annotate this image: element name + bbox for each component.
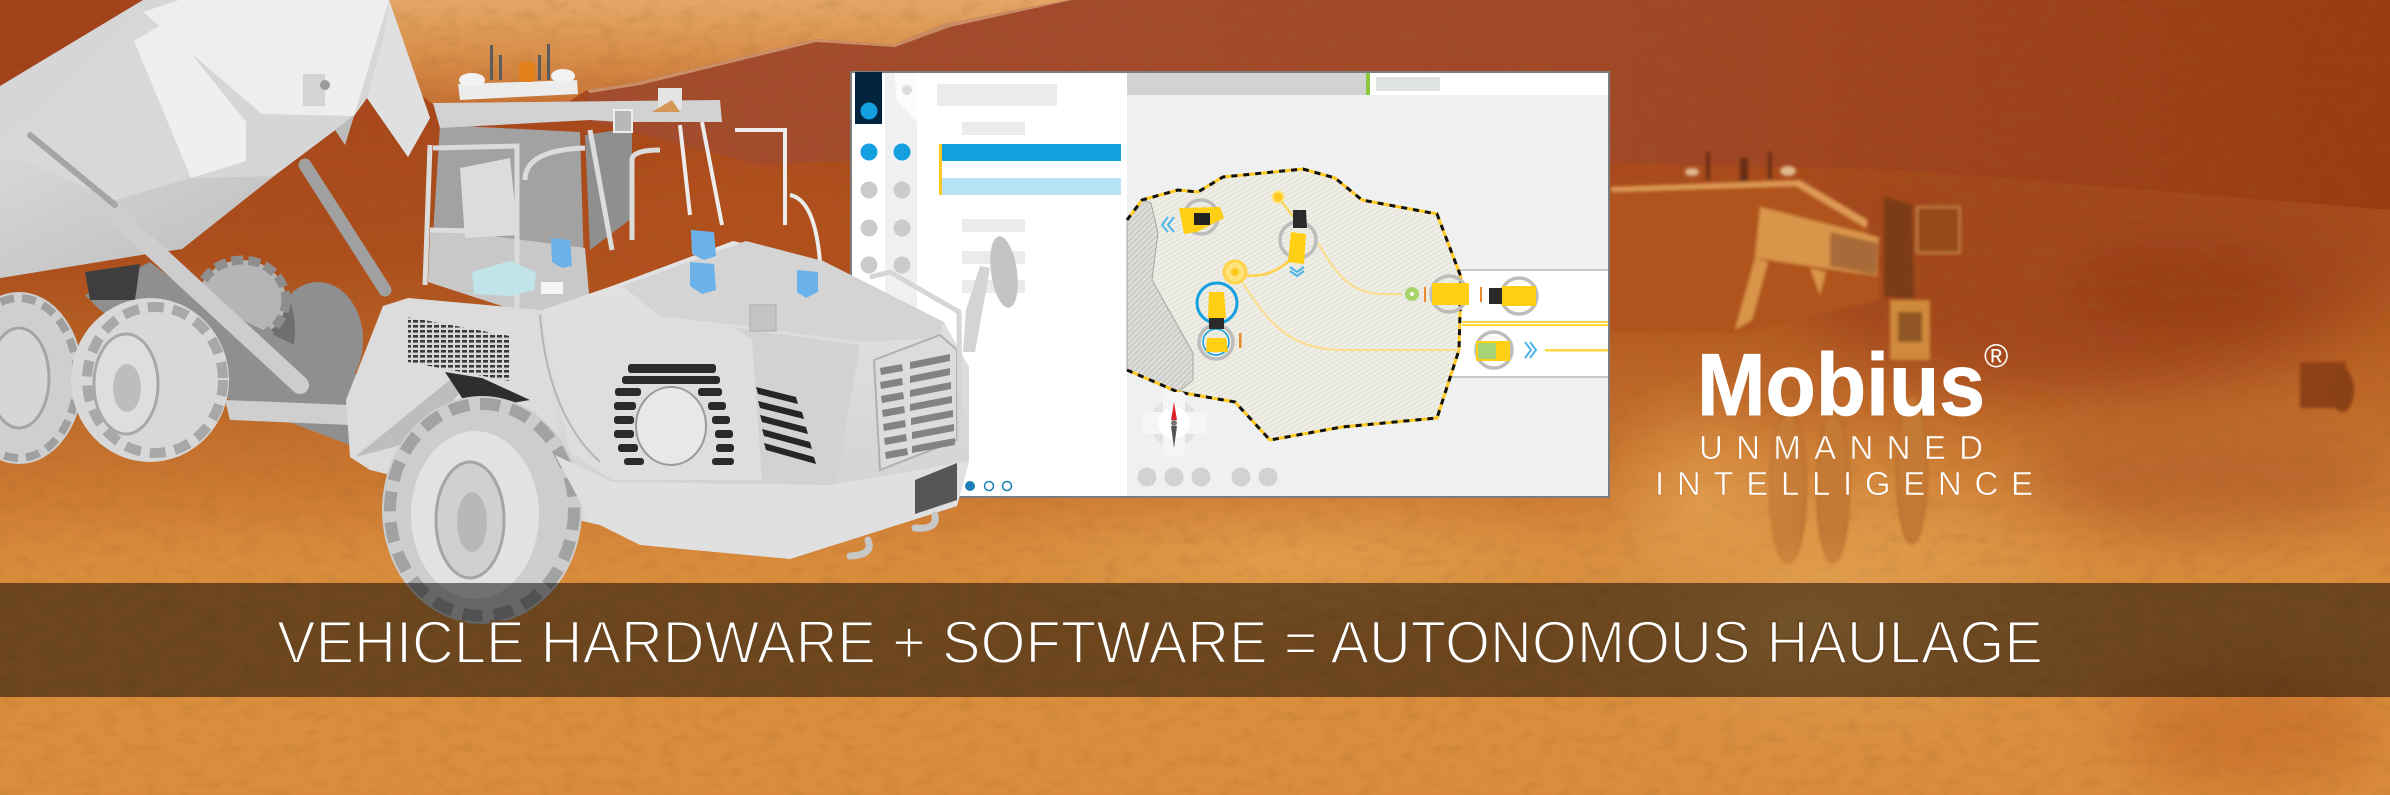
haul routes	[1243, 197, 1460, 350]
registered mark: ®	[1984, 337, 2008, 374]
vehicle markers	[1162, 192, 1537, 368]
far vehicle	[2300, 362, 2354, 412]
compass	[1142, 392, 1207, 456]
left vent with headlight	[614, 364, 734, 465]
list column	[937, 84, 1121, 491]
wheel rear-left	[0, 292, 83, 464]
banner headline: VEHICLE HARDWARE + SOFTWARE = AUTONOMOUS HAULAGE	[277, 609, 2043, 676]
map toolbar dots	[1138, 468, 1278, 486]
front wheel	[382, 372, 582, 624]
nav rail	[855, 72, 917, 360]
pit zone	[1127, 169, 1461, 440]
hood and side panel	[346, 241, 969, 559]
wordmark: Mobius	[1697, 335, 1985, 434]
hoist rams	[30, 135, 385, 385]
dump body	[0, 0, 430, 278]
mirror and rail	[870, 235, 1022, 440]
tagline line 1: UNMANNED	[1699, 429, 1983, 466]
tagline line 2: INTELLIGENCE	[1655, 465, 2033, 502]
software panel	[851, 72, 1609, 497]
right vent	[756, 387, 816, 464]
background truck in dust	[1590, 152, 2354, 730]
wheel rear-right	[71, 298, 229, 462]
tow hooks	[850, 515, 935, 556]
roof sensors	[459, 44, 575, 87]
autonomy hardware	[472, 230, 818, 298]
cab	[425, 80, 820, 312]
front grille	[874, 335, 957, 470]
tow hitch	[915, 463, 957, 514]
haul truck illustration	[0, 0, 1022, 624]
logo: Mobius Unmanned Intelligence	[1655, 335, 2033, 502]
rear wheels and chassis	[0, 260, 400, 464]
banner	[0, 583, 2390, 697]
map	[1127, 73, 1608, 496]
front bumper and vents	[555, 335, 969, 559]
